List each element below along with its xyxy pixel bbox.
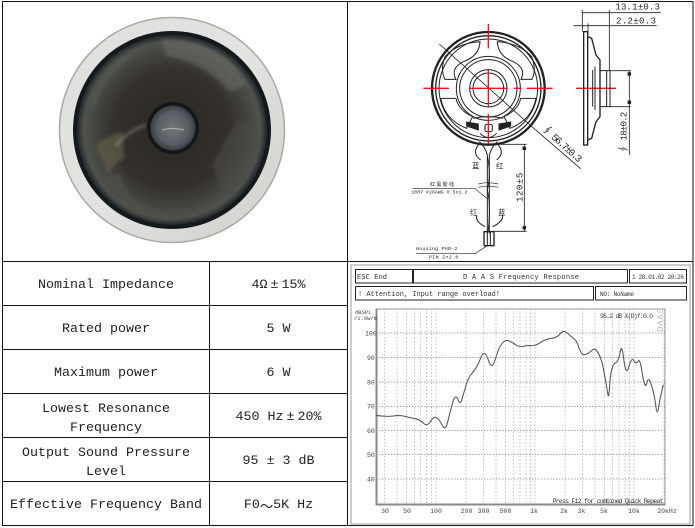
drawing: speaker side view xyxy=(584,32,610,145)
dimension: frame depth xyxy=(573,16,657,33)
drawing: lead wires: 蓝 xyxy=(472,161,479,171)
photo: speaker front view xyxy=(60,18,284,242)
chart: y axis labels: 90 xyxy=(367,355,375,362)
row: maximum power label: Maximum power xyxy=(54,366,158,381)
chart: x axis labels: 3k xyxy=(578,508,585,515)
chart: y axis labels: 60 xyxy=(367,428,375,435)
chart: x axis labels: 100 xyxy=(430,508,442,515)
row: lowest resonance frequency label: Lowest Resonance Frequency xyxy=(42,402,170,436)
label: wire specification: 1007 #26AWG 0.5x1.2 xyxy=(411,190,467,196)
chart: y axis labels: 70 xyxy=(367,404,375,410)
label: connector housing: PIN 2×2.0 xyxy=(429,255,458,261)
chart: x axis labels: 200 xyxy=(461,508,472,515)
chart: y axis labels: 50 xyxy=(367,452,375,459)
row: output sound pressure level label: Output Sound Pressure Level xyxy=(22,446,190,480)
row: effective frequency band value: F0 5K Hz xyxy=(244,498,313,513)
row: nominal impedance label: Nominal Impedance xyxy=(38,278,174,293)
dimension: magnet diameter xyxy=(610,71,631,155)
dimension: wire length: 120±5 xyxy=(516,173,526,202)
chart: y axis labels: dBSPL xyxy=(355,309,372,316)
chart: frequency response curve xyxy=(376,331,663,428)
row: nominal impedance value: 4Ω 15% xyxy=(252,278,306,293)
header: end key: ESC End xyxy=(357,274,387,282)
row: output sound pressure level value: 95 ± 3 dB xyxy=(242,454,314,469)
label: connector housing xyxy=(416,246,487,261)
chart: x axis labels: 30 xyxy=(381,508,389,515)
chart: x axis labels: 5k xyxy=(600,508,608,515)
chart: y axis labels: 100 xyxy=(365,330,377,338)
row: lowest resonance frequency value: 450 Hz 20% xyxy=(236,410,322,425)
chart: x axis labels: 50 xyxy=(403,508,411,515)
header: title xyxy=(414,270,628,283)
header: title: D A A S Frequency Response xyxy=(463,274,579,282)
header: date xyxy=(630,270,686,283)
label: wire specification: 红黑胶线 xyxy=(430,181,454,188)
dimension: overall depth: 13.1±0.3 xyxy=(615,2,660,12)
drawing: lead wires: 红 xyxy=(470,208,477,218)
chart: x axis labels: 20kHz xyxy=(657,508,677,515)
row: effective frequency band value: ～ xyxy=(260,496,273,515)
chart: x axis labels: 2k xyxy=(560,508,568,515)
chart: plot frame and grid xyxy=(376,309,665,505)
chart: y axis labels: 40 xyxy=(367,476,375,484)
label: outer diameter: ∮ 56.7±0.3 xyxy=(539,123,585,165)
file name: NO: NoName xyxy=(600,291,634,298)
dimension: frame depth: 2.2±0.3 xyxy=(616,16,656,26)
drawing: red centre lines xyxy=(423,24,616,144)
warning message: ! Attention, Input range overload! xyxy=(358,291,500,299)
drawing: lead wires xyxy=(470,142,505,246)
drawing: lead wires: 蓝 xyxy=(498,208,505,218)
header: date: 1 28.01.02 20:26 xyxy=(632,274,684,281)
chart: x axis labels xyxy=(381,508,677,515)
chart: DAAS watermark: DAAS xyxy=(656,308,666,332)
drawing: diameter leader line xyxy=(439,44,581,169)
technical drawing xyxy=(411,2,661,261)
chart: y axis labels xyxy=(354,309,378,484)
chart: x axis labels: 1k xyxy=(530,508,538,515)
warning message xyxy=(356,286,594,300)
drawing: lead wires: 红 xyxy=(496,161,503,171)
dimension: wire length xyxy=(492,144,527,231)
label: connector housing: Housing PHR-2 xyxy=(416,246,457,252)
header: end key xyxy=(356,270,412,283)
chart: x axis labels: 500 xyxy=(500,508,511,515)
row: rated power label: Rated power xyxy=(62,322,150,337)
chart: reading: 95.2 dB X(D)f:0.0 xyxy=(600,313,653,320)
row: rated power value: 5 W xyxy=(266,322,290,337)
label: wire specification xyxy=(411,181,487,199)
row: lowest resonance frequency value: ± xyxy=(286,410,294,425)
row: nominal impedance value: ± xyxy=(270,278,278,293)
row: effective frequency band label: Effective Frequency Band xyxy=(10,498,202,513)
dimension: overall depth xyxy=(582,2,661,71)
chart: x axis labels: 300 xyxy=(478,508,489,515)
chart: y axis labels: 80 xyxy=(367,380,375,386)
chart: y axis labels: /1.0W/m xyxy=(354,315,378,322)
row: maximum power value: 6 W xyxy=(266,366,290,381)
chart: footer hint: Press F12 for combined Quick Repeat xyxy=(552,498,664,505)
chart: x axis labels: 10k xyxy=(628,508,640,515)
dimension: magnet diameter: ∮ 18±0.2 xyxy=(618,112,629,153)
drawing: speaker front outline xyxy=(432,32,545,145)
frequency response screenshot xyxy=(351,265,690,524)
file name xyxy=(596,286,686,300)
